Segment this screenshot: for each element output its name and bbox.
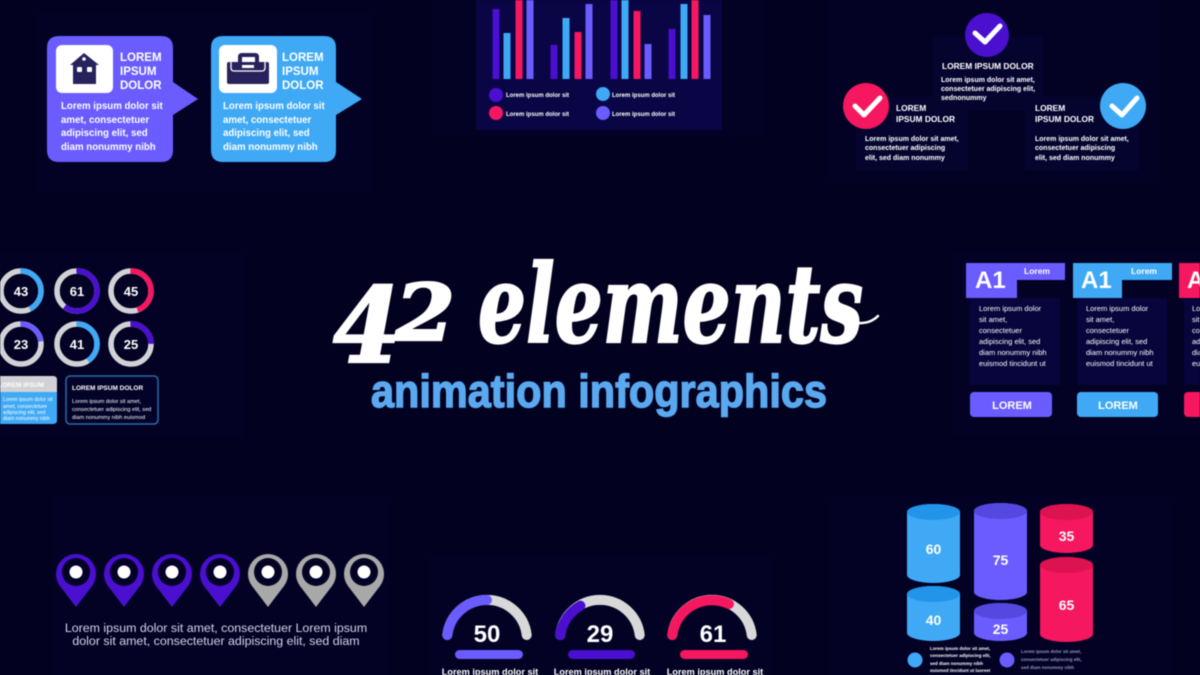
card: purple: sit amet, [979,315,1007,324]
card: purple [966,263,1065,417]
check item: left: LOREM [896,103,926,113]
gauge: 50: 50 [474,621,500,648]
bubble: toolbox [211,36,362,162]
check item: top: sednonummy [941,95,987,102]
card: blue: euismod tincidunt ut [1086,359,1154,368]
card: blue: Lorem ipsum dolor [1086,304,1149,313]
info box: filled: Lorem ipsum dolor sit [3,397,53,403]
card: blue: A1 [1081,267,1112,294]
title: 4 [333,264,401,387]
card: blue: diam nonummy nibh [1086,348,1154,357]
ring: 43: 43 [14,284,28,299]
ring: 25: 25 [124,337,138,352]
check item: left: Lorem ipsum dolor sit amet, [865,136,959,143]
bubble body text: adipiscing elit, sed [223,128,310,139]
check item: right: IPSUM DOLOR [1035,114,1094,124]
info box: outlined [66,376,158,424]
panel: bar chart [432,0,765,136]
info box: outlined: diam nonummy nibh euismod [72,415,145,421]
panel: speech bubbles [35,12,372,192]
check item: top: consectetuer adipiscing elit, [941,86,1035,93]
ring: 45: 45 [124,284,138,299]
info box: outlined: LOREM IPSUM DOLOR [72,385,143,392]
bubble body text: diam nonummy nibh [223,142,318,153]
check item: right: consectetuer adipiscing [1035,145,1115,152]
ring: 41: 41 [70,337,84,352]
cylinder legend: purple: consectetuer adipiscing elit, [1021,657,1082,662]
ring: 25 [111,324,151,364]
bubble heading: LOREM [282,52,324,64]
cylinder legend: purple: Lorem ipsum dolor sit amet, [1021,649,1081,654]
check item: left: elit, sed diam nonummy [865,155,945,162]
bubble body text: Lorem ipsum dolor sit [223,101,326,112]
panel: gauges [430,555,770,675]
bubble body text: Lorem ipsum dolor sit [61,101,164,112]
ring: 23: 23 [14,337,28,352]
info box: filled: diam nonummy nibh [3,416,50,422]
bubble: house [47,36,198,162]
bubble heading: IPSUM [120,66,156,78]
bubble heading: IPSUM [282,66,318,78]
bubble body text: amet, consectetuer [61,115,150,126]
panel: A1 cards [952,250,1200,434]
card: blue: consectetuer [1086,326,1129,335]
cylinder column: purple [974,503,1027,641]
gauge: 29 [554,600,650,675]
check item: right: elit, sed diam nonummy [1035,155,1115,162]
cylinder column: blue: 40 [926,612,941,628]
check item: left: IPSUM DOLOR [896,114,955,124]
card: pink [1179,263,1200,417]
check item: right: LOREM [1035,103,1065,113]
cylinder legend: blue [908,646,991,673]
pin row [56,554,384,607]
ring: 23 [1,324,41,364]
chart legend: Lorem ipsum dolor sit [612,112,675,118]
ring: 61 [57,271,97,311]
gauge: 50 [442,600,538,675]
cylinder legend: blue: sed diam nonummy nibh [930,661,983,666]
check item: right [1025,83,1146,170]
cylinder column: blue [907,504,960,641]
bar chart [492,0,710,79]
check item: left [843,83,968,170]
panel: location pins [52,497,390,675]
bubble body text: diam nonummy nibh [61,142,156,153]
check item: top [933,13,1042,110]
cylinder column: purple: 75 [993,552,1008,568]
title: elements [478,242,863,368]
gauge: 29: 29 [587,621,613,648]
button [1077,392,1158,417]
card: purple: consectetuer [979,326,1022,335]
info box: outlined: consectetuer adipiscing elit, sed [72,407,151,413]
bubble body text: adipiscing elit, sed [61,128,148,139]
gauge: 61 [667,600,763,675]
cylinder column: pink [1040,504,1093,642]
bubble heading: DOLOR [120,80,162,92]
pin caption: Lorem ipsum dolor sit amet, consectetuer Lorem ipsum [65,621,367,635]
chart legend: Lorem ipsum dolor sit [506,93,569,99]
info box: filled [0,376,57,424]
check item: top: LOREM IPSUM DOLOR [942,61,1034,71]
check item: top: Lorem ipsum dolor sit amet, [941,77,1035,84]
pin caption: dolor sit amet, consectetuer adipiscing elit, sed diam [72,634,360,648]
cylinder legend: purple: sed diam nonummy nibh [1021,665,1074,670]
cylinder legend: blue: consectetuer adipiscing elit, [930,653,991,658]
card: purple: diam nonummy nibh [979,348,1047,357]
cylinder column: pink: 65 [1059,597,1074,613]
button: LOREM [1098,400,1138,412]
chart legend: Lorem ipsum dolor sit [612,93,675,99]
card: blue: Lorem [1131,266,1157,276]
cylinder legend: blue: Lorem ipsum dolor sit amet, [930,646,990,651]
panel: cylinders [830,497,1170,675]
cylinder column: blue: 60 [926,541,941,557]
info box: filled: adipiscing elit, sed [3,410,46,416]
button: LOREM [992,400,1032,412]
bubble heading: LOREM [120,52,162,64]
card: purple: A1 [975,267,1006,294]
check item: left: consectetuer adipiscing [865,145,945,152]
ring: 61: 61 [70,284,84,299]
title: 2 [394,268,455,359]
ring: 43 [1,271,41,311]
card: purple: adipiscing elit, sed [979,337,1040,346]
subtitle: animation infographics [371,365,827,417]
card: blue: sit amet, [1086,315,1114,324]
check item: right: Lorem ipsum dolor sit amet, [1035,136,1129,143]
bubble heading: DOLOR [282,80,324,92]
ring: 41 [57,324,97,364]
chart legend: Lorem ipsum dolor sit [506,112,569,118]
cylinder column: purple: 25 [993,621,1008,637]
button [970,392,1052,417]
chart legend [489,87,675,120]
icon: toolbox [227,55,269,84]
ring: 45 [111,271,151,311]
card: purple: Lorem [1024,266,1050,276]
card: purple: euismod tincidunt ut [979,359,1047,368]
gauge: 61: 61 [700,621,726,648]
cylinder legend: purple [1000,649,1082,670]
title [333,242,878,387]
cylinder column: pink: 35 [1059,528,1074,544]
panel: check items [826,0,1160,183]
info box: outlined: Lorem ipsum dolor sit amet, [72,399,141,405]
card: blue [1073,263,1172,417]
info box: filled: amet, consectetuer [3,404,47,410]
card: blue: adipiscing elit, sed [1086,337,1147,346]
card: purple: Lorem ipsum dolor [979,304,1042,313]
panel: progress rings [0,252,245,438]
bubble body text: amet, consectetuer [223,115,312,126]
icon: house [70,53,99,84]
cylinder legend: blue: euismod tincidunt ut laoreet [930,668,991,673]
